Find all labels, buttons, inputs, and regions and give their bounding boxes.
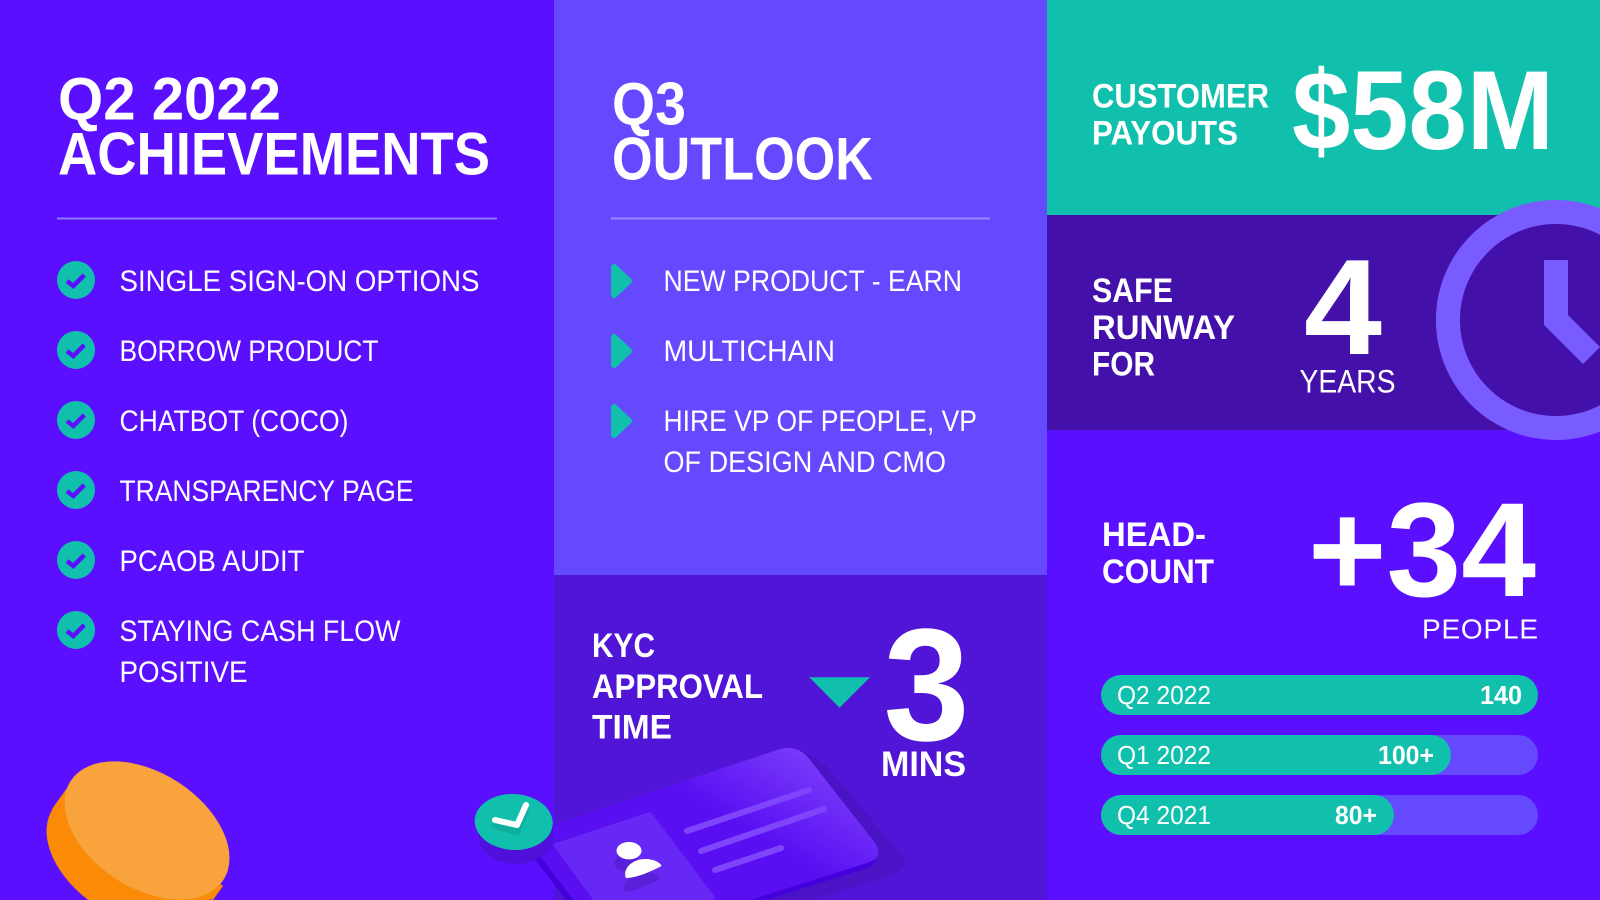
item: PCAOB audit: PCAOB AUDIT [120, 545, 304, 578]
stat: 3 mins: MINS [881, 745, 966, 784]
panel: headcount background [1047, 430, 1600, 900]
item: chatbot: CHATBOT (COCO) [120, 405, 348, 438]
list: achievements [57, 261, 480, 689]
item: hires: HIRE VP OF PEOPLE, VP [664, 405, 977, 438]
panel: KYC background [554, 575, 1047, 900]
heading: Q3 outlook [612, 70, 873, 192]
item: single sign-on: SINGLE SIGN-ON OPTIONS [120, 265, 480, 298]
heading: Q3 outlook: Q3 [612, 70, 686, 138]
stat: +34 people: PEOPLE [1422, 614, 1538, 644]
bar: Q1 2022: 100+ [1378, 742, 1434, 770]
stat: 4 years: YEARS [1300, 364, 1396, 400]
bar: Q4 2021: Q4 2021 [1117, 802, 1211, 830]
bar: Q2 2022: 140 [1480, 682, 1522, 710]
icon: person [614, 842, 662, 892]
bar: Q2 2022: Q2 2022 [1117, 682, 1211, 710]
item: staying cash flow positive [57, 611, 401, 689]
panel: safe runway background [1047, 215, 1600, 430]
safe runway label: RUNWAY [1092, 309, 1235, 347]
stat: $58M: $58M [1292, 48, 1554, 173]
item: transparency page: TRANSPARENCY PAGE [120, 475, 414, 508]
customer payouts label: CUSTOMER [1092, 78, 1269, 116]
panel: outlook background [554, 0, 1047, 575]
item: PCAOB audit [57, 541, 304, 579]
heading: Q2 2022 achievements [58, 66, 490, 188]
stat: +34 people: +34 [1308, 476, 1536, 625]
KYC label: KYC [592, 627, 655, 665]
headcount label [1102, 516, 1214, 591]
KYC label [592, 627, 763, 746]
heading: Q3 outlook: OUTLOOK [612, 126, 873, 192]
item: staying cash flow positive: STAYING CASH FLOW [120, 615, 401, 648]
bar: Q1 2022 [1101, 735, 1538, 775]
item: transparency page [57, 471, 414, 509]
customer payouts label [1092, 78, 1269, 152]
heading: Q2 2022 achievements: ACHIEVEMENTS [58, 120, 490, 188]
safe runway label: FOR [1092, 346, 1155, 384]
icon: teal check badge [473, 792, 554, 864]
safe runway label [1092, 272, 1235, 384]
stat: 4 years: 4 [1304, 231, 1382, 383]
text lines [687, 790, 824, 870]
item: hires: OF DESIGN AND CMO [664, 446, 946, 479]
KYC label: TIME [592, 708, 672, 746]
icon: clock [1436, 200, 1600, 440]
bar: Q4 2021: 80+ [1335, 802, 1377, 830]
item: new product: NEW PRODUCT - EARN [664, 265, 962, 298]
photo panel [555, 814, 713, 898]
item: hires [614, 405, 977, 479]
item: chatbot [57, 401, 348, 439]
bar: Q4 2021 [1101, 795, 1538, 835]
illustration: ID card [528, 748, 904, 900]
icon: down triangle [809, 677, 870, 708]
item: staying cash flow positive: POSITIVE [120, 656, 248, 689]
safe runway label: SAFE [1092, 272, 1173, 310]
panel: achievements background [0, 0, 554, 900]
KYC label: APPROVAL [592, 668, 763, 706]
item: multichain: MULTICHAIN [664, 335, 835, 368]
item: borrow product: BORROW PRODUCT [120, 335, 378, 368]
bar: Q1 2022: Q1 2022 [1117, 742, 1211, 770]
stat: 3 mins: 3 [884, 595, 970, 774]
bar chart: headcount by quarter [1101, 675, 1538, 835]
list: outlook [614, 265, 977, 479]
icon: orange coin [39, 733, 255, 900]
heading: Q2 2022 achievements: Q2 2022 [58, 66, 281, 132]
item: borrow product [57, 331, 378, 369]
customer payouts label: PAYOUTS [1092, 114, 1238, 152]
headcount label: HEAD- [1102, 516, 1206, 554]
headcount label: COUNT [1102, 553, 1214, 591]
panel: customer payouts background [1047, 0, 1600, 215]
bar: Q2 2022 [1101, 675, 1538, 715]
